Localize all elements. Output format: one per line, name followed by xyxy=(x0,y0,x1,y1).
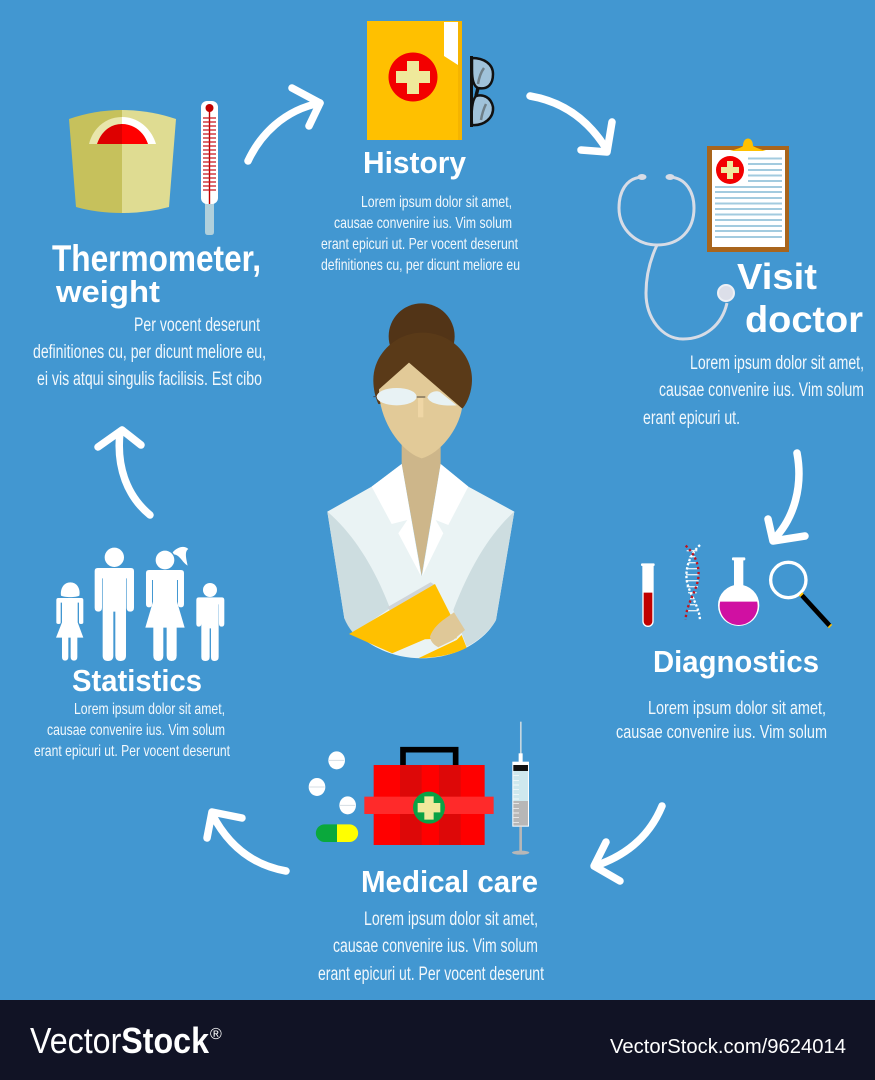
text block: diagnostics description xyxy=(616,698,827,742)
heading: medical care: Medical care xyxy=(361,864,538,899)
icon: magnifying glass xyxy=(771,562,832,628)
icon: glasses xyxy=(472,56,493,127)
icon: clipboard xyxy=(707,138,789,252)
panel: medical care xyxy=(309,722,545,985)
text block: medical care description xyxy=(318,909,545,985)
icon: medical folder xyxy=(367,21,462,140)
text block: statistics description: erant epicuri ut. Per vocent deserunt xyxy=(34,743,230,760)
heading: visit doctor xyxy=(737,256,863,340)
panel: thermometer and weight xyxy=(33,101,266,390)
text block: visit doctor description: erant epicuri ut. xyxy=(643,408,740,429)
footer band xyxy=(0,1000,875,1080)
heading: visit doctor: doctor xyxy=(745,299,863,340)
text block: medical care description: Lorem ipsum dolor sit amet, xyxy=(364,909,538,930)
panel: diagnostics xyxy=(616,545,832,742)
icon: pills xyxy=(309,751,358,842)
text block: history description: causae convenire ius. Vim solum xyxy=(334,215,512,232)
arrow: history to visit doctor xyxy=(530,96,612,152)
icon: stethoscope xyxy=(619,174,734,339)
icon: first aid kit xyxy=(364,750,494,845)
panel: statistics xyxy=(34,547,230,760)
text block: medical care description: erant epicuri ut. Per vocent deserunt xyxy=(318,964,545,985)
arrow: thermometer to history xyxy=(248,88,320,161)
text block: diagnostics description: causae convenire ius. Vim solum xyxy=(616,722,827,742)
text block: thermometer description: ei vis atqui singulis facilisis. Est cibo xyxy=(37,369,262,390)
text block: thermometer description: definitiones cu, per dicunt meliore eu, xyxy=(33,342,266,363)
heading: visit doctor: Visit xyxy=(737,256,817,297)
icon: thermometer xyxy=(201,101,218,235)
icon: DNA helix xyxy=(686,545,700,620)
text block: thermometer description: Per vocent deserunt xyxy=(134,315,261,336)
arrow: statistics to thermometer xyxy=(98,430,150,515)
icon: flask xyxy=(718,557,759,626)
arrow: medical care to statistics xyxy=(207,812,286,871)
text block: history description: definitiones cu, per dicunt meliore eu xyxy=(321,257,520,274)
footer link text: VectorStock.com/9624014 xyxy=(610,1036,846,1058)
text block: history description xyxy=(321,194,520,274)
registered mark: ® xyxy=(210,1026,222,1043)
text block: thermometer description xyxy=(33,315,266,390)
text block: visit doctor description xyxy=(643,353,864,429)
arrow: diagnostics to medical care xyxy=(594,806,662,881)
icon: test tube xyxy=(641,563,655,627)
icon: family of four xyxy=(56,547,224,661)
heading: thermometer, weight: Thermometer, xyxy=(52,238,261,279)
illustration: doctor xyxy=(327,303,514,658)
heading: diagnostics: Diagnostics xyxy=(653,644,819,679)
footer logo: VectorStock: VectorStock xyxy=(30,1020,210,1061)
heading: history: History xyxy=(363,145,467,180)
icon: bathroom scale xyxy=(69,110,176,213)
text block: diagnostics description: Lorem ipsum dolor sit amet, xyxy=(648,698,826,718)
heading: statistics: Statistics xyxy=(72,663,202,698)
panel: history xyxy=(321,21,520,274)
panel: visit doctor xyxy=(619,138,864,429)
text block: history description: erant epicuri ut. Per vocent deserunt xyxy=(321,236,518,253)
icon: syringe xyxy=(512,722,529,855)
heading: thermometer, weight: weight xyxy=(55,274,160,309)
text block: statistics description: causae convenire ius. Vim solum xyxy=(47,722,225,739)
text block: statistics description: Lorem ipsum dolor sit amet, xyxy=(74,701,225,718)
text block: history description: Lorem ipsum dolor sit amet, xyxy=(361,194,512,211)
text block: medical care description: causae convenire ius. Vim solum xyxy=(333,936,538,957)
text block: statistics description xyxy=(34,701,230,760)
heading: thermometer, weight xyxy=(52,238,261,309)
arrow: visit doctor to diagnostics xyxy=(768,453,805,541)
